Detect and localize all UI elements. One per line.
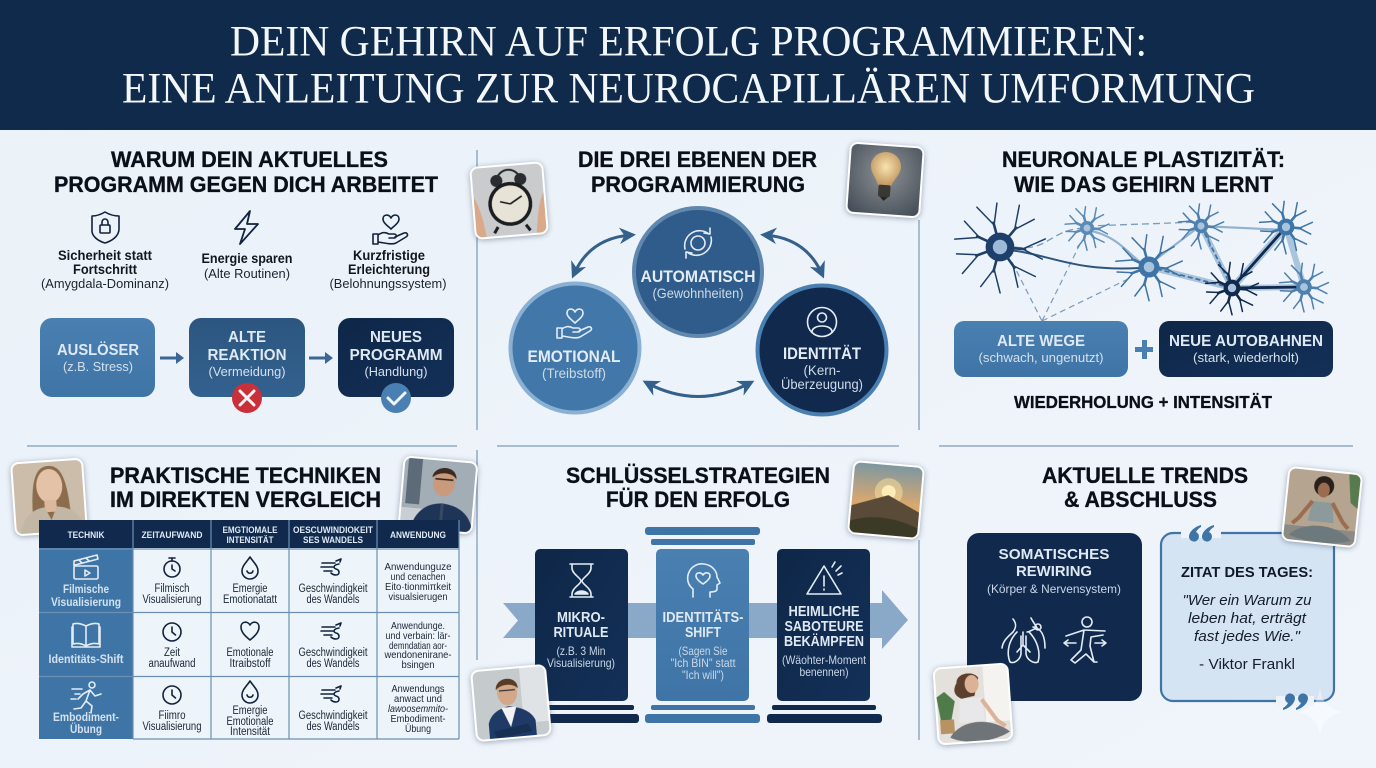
pillar: heimliche saboteure [767,549,882,723]
row: filmische visualisierung: Emotionatatt [223,594,278,606]
box: neues programm: (Handlung) [364,364,428,379]
icon: heart [241,622,259,640]
header banner [0,0,1376,130]
row: embodiment-uebung: lawoosemmito- [388,703,448,715]
heading: aktuelle trends: & ABSCHLUSS [1064,487,1217,512]
pillar: mikro-rituale: (z.B. 3 Min [556,644,606,658]
neuron 7 [1279,263,1329,312]
circle: emotional: (Treibstoff) [542,365,606,381]
table header [68,525,446,546]
row: embodiment-uebung: Übung [405,723,431,735]
pillar: identitaets-shift: "Ich BIN" statt [670,656,736,670]
row: identitaets-shift [48,620,452,671]
icon: clapperboard [74,555,98,579]
icon: refresh [685,228,711,258]
photo: alarm clock [467,157,553,245]
pillar: identitaets-shift: IDENTITÄTS- [662,609,744,626]
circle: identitaet: Überzeugung) [781,375,863,392]
icon: lightning bolt [235,211,258,244]
arrow [309,352,333,364]
icon: moving figure [1064,617,1106,663]
heading: drei ebenen [578,147,817,197]
card: somatisches rewiring [967,533,1142,701]
circle: automatisch: AUTOMATISCH [640,267,756,286]
circle: automatisch [634,208,762,336]
box: alte reaktion: (Vermeidung) [208,364,286,379]
pillar: heimliche saboteure: (Wäohter-Moment [782,653,867,667]
photo: light bulb [843,138,927,223]
pillar: mikro-rituale [524,549,639,723]
panel: neuronale plastizitaet [954,147,1333,412]
row: embodiment-uebung: Anwendungs [392,683,444,695]
row: identitaets-shift: Emotionale [226,647,274,659]
heading: drei ebenen: DIE DREI EBENEN DER [578,147,817,172]
panel: schluesselstrategien [467,456,928,748]
row: identitaets-shift: bsingen [402,659,435,671]
card: zitat des tages: leben hat, erträgt [1188,610,1307,627]
row: embodiment-uebung: anwact und [394,693,442,705]
table header: ANWENDUNG [390,530,446,541]
circle: automatisch: (Gewohnheiten) [652,285,744,301]
row: embodiment-uebung: Embodiment- [53,710,119,724]
heading: neuronale plastizitaet: NEURONALE PLASTIZITÄT: [1002,147,1285,172]
heading: warum: WARUM DEIN AKTUELLES [111,147,388,172]
box: neues programm: NEUES [370,329,422,346]
row: identitaets-shift: Zeit [164,647,181,659]
circle: identitaet [758,286,886,414]
text: sicherheit statt fortschritt: (Amygdala-Dominanz) [41,276,169,291]
row: identitaets-shift: wendonenirane- [384,649,452,661]
panel: aktuelle trends [930,461,1368,749]
row: filmische visualisierung: Filmisch [154,583,190,595]
icon: speed [321,623,341,639]
photo: yoga woman [1278,464,1366,552]
icon: hand heart [557,309,591,338]
table header: OESCUWINDIOKEIT [293,525,373,536]
heading: drei ebenen: PROGRAMMIERUNG [591,172,805,197]
heading: praktische techniken: PRAKTISCHE TECHNIKEN [110,463,381,488]
icon: sparkle [1296,688,1344,736]
text: energie sparen: (Alte Routinen) [204,266,290,281]
text: kurzfristige erleichterung [330,248,446,291]
box: alte reaktion: ALTE [228,329,266,346]
icon: closing quote mark [1283,693,1308,710]
pillar: heimliche saboteure: benennen) [800,665,848,679]
arrow: automatisch to identitaet [765,235,822,274]
box: alte reaktion: REAKTION [208,347,286,364]
box: alte wege: ALTE WEGE [997,333,1085,350]
neuron 5 [1260,201,1312,254]
row: filmische visualisierung: Anwendunguze [384,561,452,573]
box: ausloeser: (z.B. Stress) [63,359,133,374]
row: embodiment-uebung: Fiimro [158,710,186,722]
arrow [160,352,184,364]
circle: emotional [510,284,640,412]
icon: drop [242,557,258,579]
icon: user [808,308,836,336]
table header: SES WANDELS [303,535,363,546]
icon: plus [1135,340,1153,359]
icon: open book [72,623,100,647]
row: embodiment-uebung: Embodiment- [390,713,446,725]
icon: clock [163,623,181,641]
row: identitaets-shift: Anwendunge. [391,620,445,632]
heading: schluesselstrategien: FÜR DEN ERFOLG [606,487,790,512]
pillar: identitaets-shift: "Ich will") [682,668,724,682]
circle: emotional: EMOTIONAL [528,347,620,366]
icon: opening quote mark [1189,525,1214,542]
row: identitaets-shift: Geschwindigkeit [298,647,368,659]
text: energie sparen: Energie sparen [202,251,292,266]
table header: TECHNIK [68,530,105,541]
neuron 4 [1178,203,1224,249]
pillar: identitaets-shift [645,527,760,723]
box: alte wege: (schwach, ungenutzt) [978,350,1104,365]
card: somatisches rewiring: REWIRING [1016,563,1092,580]
row: identitaets-shift: Identitäts-Shift [48,652,124,666]
icon: stopwatch [164,558,180,577]
photo: meditating woman [930,660,1015,749]
photo: woman eyes closed [7,454,91,540]
photo: businessman [467,661,554,748]
pillar: mikro-rituale: Visualisierung) [547,656,615,670]
heading: warum [54,147,438,197]
table header: INTENSITÄT [226,535,274,546]
row: identitaets-shift: und verbain: lär- [386,630,451,642]
box: ausloeser: AUSLÖSER [57,340,139,359]
box: neue autobahnen: (stark, wiederholt) [1193,350,1299,365]
text: sicherheit statt fortschritt: Sicherheit statt [58,248,152,263]
row: embodiment-uebung: Visualisierung [142,721,202,733]
title [122,18,1255,112]
row: identitaets-shift: anaufwand [148,658,196,670]
row: identitaets-shift: demndatian aor- [389,640,447,652]
panel: praktische techniken [7,451,481,739]
table header: ZEITAUFWAND [142,530,203,541]
icon: speed [321,559,341,575]
circle: identitaet: IDENTITÄT [783,344,862,363]
panel: die drei ebenen [467,138,927,414]
text: sicherheit statt fortschritt: Fortschritt [73,262,137,277]
row: identitaets-shift: Itraibstoff [230,658,271,670]
icon: blue check [381,383,411,413]
heading: praktische techniken: IM DIREKTEN VERGLEICH [110,487,381,512]
table header: EMGTIOMALE [222,525,278,536]
title: DEIN GEHIRN AUF ERFOLG PROGRAMMIEREN: [230,18,1147,66]
text: wiederholung + intensitaet: WIEDERHOLUNG + INTENSITÄT [1014,392,1272,412]
neuron 6 [1206,262,1258,315]
pillar: identitaets-shift: SHIFT [685,624,721,641]
heading: neuronale plastizitaet: WIE DAS GEHIRN LERNT [1014,172,1273,197]
row: filmische visualisierung: und cenachen [390,571,446,583]
row: embodiment-uebung: Intensität [230,726,271,738]
row: filmische visualisierung: des Wandels [306,594,360,606]
box: neue autobahnen [1159,321,1333,377]
text: kurzfristige erleichterung: Kurzfristige [353,248,425,263]
row: filmische visualisierung: visualsierugen [388,591,448,603]
icon: warning [807,562,842,594]
icon: hourglass [570,564,593,597]
arrow: emotional to automatisch [574,235,631,274]
icon: lungs [1002,618,1045,663]
heading: schluesselstrategien [566,463,830,512]
pillar: heimliche saboteure: HEIMLICHE [788,603,860,620]
row: filmische visualisierung: Visualisierung [142,594,202,606]
card: zitat des tages: - Viktor Frankl [1199,656,1295,673]
heading: aktuelle trends: AKTUELLE TRENDS [1042,463,1248,488]
text: sicherheit statt fortschritt [41,248,169,291]
box: neues programm: PROGRAMM [350,347,442,364]
card: somatisches rewiring: SOMATISCHES [998,546,1110,563]
icon: runner [71,682,101,713]
heading: warum: PROGRAMM GEGEN DICH ARBEITET [54,172,438,197]
icon: shield with lock [92,212,119,243]
row: embodiment-uebung: Übung [70,721,102,736]
pillar: heimliche saboteure: SABOTEURE [784,618,864,635]
box: ausloeser [40,318,155,397]
photo: sunrise [844,456,928,542]
title: EINE ANLEITUNG ZUR NEUROCAPILLÄREN UMFORMUNG [122,66,1255,112]
text: kurzfristige erleichterung: (Belohnungssystem) [330,276,446,291]
pillar: identitaets-shift: (Sagen Sie [678,644,728,658]
pillar: mikro-rituale: RITUALE [554,624,608,641]
row: identitaets-shift: des Wandels [306,658,360,670]
heading: schluesselstrategien: SCHLÜSSELSTRATEGIEN [566,463,830,488]
neuron 1 [955,202,1045,293]
heading: neuronale plastizitaet [1002,147,1285,197]
panel: warum dein aktuelles programm [40,147,454,413]
box: neues programm [338,318,454,397]
card: zitat des tages: ZITAT DES TAGES: [1181,564,1313,581]
text: energie sparen [202,251,292,281]
arrow: background flow [503,590,908,649]
row: filmische visualisierung [51,555,452,609]
pillar: mikro-rituale: MIKRO- [557,609,605,626]
card: zitat des tages: fast jedes Wie." [1194,628,1301,645]
arrow: emotional to identitaet [647,383,750,396]
icon: drop [242,681,258,703]
icon: red cross [232,383,262,413]
text: kurzfristige erleichterung: Erleichterung [348,262,430,277]
row: filmische visualisierung: Visualisierung [51,595,121,609]
row: filmische visualisierung: Filmische [63,582,109,596]
icon: hand with heart [373,215,407,244]
heading: aktuelle trends [1042,463,1248,512]
comparison table [39,520,459,739]
neuron network [955,201,1329,321]
row: embodiment-uebung: Emergie [232,705,268,717]
icon: head with heart [688,564,720,597]
row: embodiment-uebung: Emotionale [226,716,274,728]
icon: speed [321,686,341,702]
card: somatisches rewiring: (Körper & Nervensystem) [987,582,1121,596]
pillar: heimliche saboteure: BEKÄMPFEN [784,633,864,650]
card: zitat des tages [1161,525,1334,710]
card: zitat des tages: "Wer ein Warum zu [1182,592,1312,609]
icon: clock [163,686,181,704]
row: embodiment-uebung: des Wandels [306,721,360,733]
neuron 2 [1065,206,1109,250]
photo: man at laptop [394,451,481,540]
row: filmische visualisierung: Emergie [232,583,268,595]
circle: identitaet: (Kern- [804,362,841,378]
row: embodiment-uebung: Geschwindigkeit [298,710,368,722]
box: alte reaktion [189,318,305,397]
row: filmische visualisierung: Geschwindigkeit [298,583,368,595]
box: neue autobahnen: NEUE AUTOBAHNEN [1169,333,1323,350]
neuron 3 [1116,234,1182,301]
row: embodiment-uebung [53,681,448,738]
heading: praktische techniken [110,463,381,512]
row: filmische visualisierung: Eito·tionmiπkeit [385,581,451,593]
box: alte wege [954,321,1128,377]
